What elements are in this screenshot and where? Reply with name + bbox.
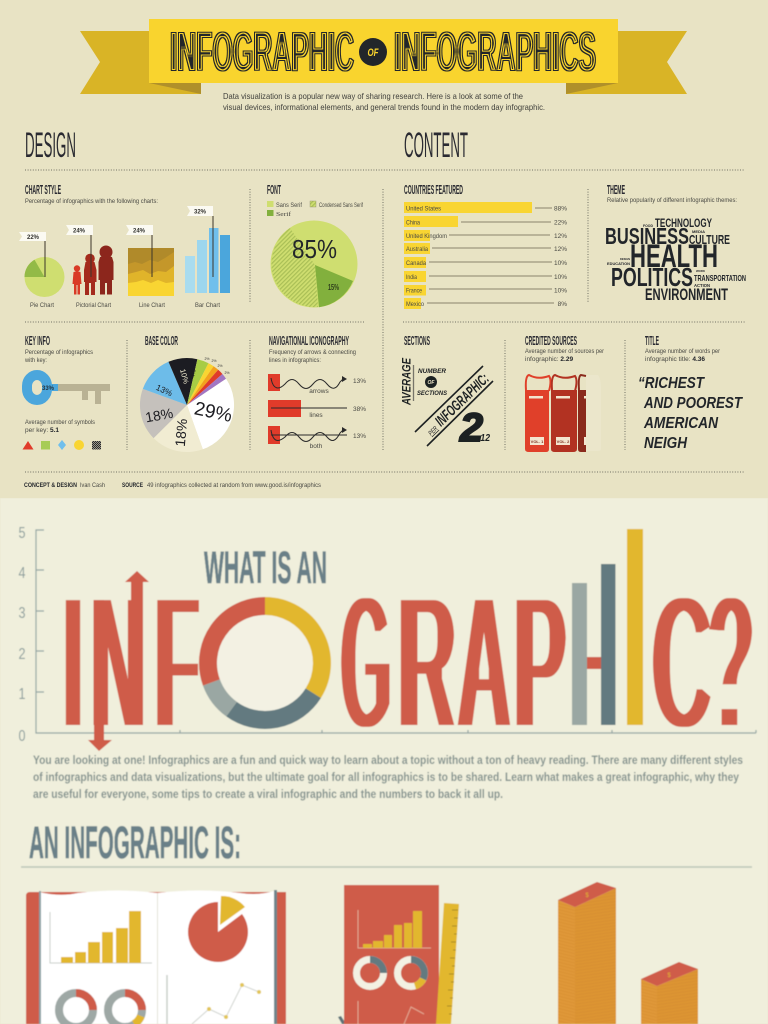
base color pie chart: 2%: [211, 359, 217, 363]
bar chart icon: [185, 206, 230, 309]
arrows row: [268, 374, 366, 395]
donut chart letter O: [208, 606, 322, 720]
lines row: lines: [309, 412, 323, 419]
book bar chart: [50, 911, 152, 963]
intro text: visual devices, informational elements, and general trends found in the modern day infographic.: [223, 102, 545, 112]
lines row: [268, 400, 366, 419]
panel: theme: [605, 182, 746, 304]
panel: what is an infographic: [0, 498, 768, 1024]
base color pie chart: [140, 357, 234, 452]
base color pie chart: 2%: [204, 357, 210, 361]
countries values: 10%: [554, 260, 567, 267]
clipboard line chart: [358, 1001, 424, 1024]
word cloud: DESIGN: [620, 257, 630, 261]
lines row: 38%: [353, 406, 366, 413]
countries labels: United Kingdom: [406, 233, 447, 240]
font pie chart: [270, 220, 358, 308]
panel: what is an infographic: AN INFOGRAPHIC IS:: [29, 817, 241, 868]
font pie chart: 15%: [328, 283, 339, 292]
countries labels: France: [406, 288, 422, 294]
navigation subtitle: Frequency of arrows & connecting: [269, 349, 356, 356]
ribbon left fold: [149, 83, 201, 94]
text: NAVIGATIONAL ICONOGRAPHY: [269, 333, 349, 348]
ribbon right tail: [566, 31, 687, 94]
chart style subtitle: Percentage of infographics with the following charts:: [25, 198, 158, 205]
chart axes: 1: [18, 686, 26, 703]
countries values: 88%: [554, 206, 567, 212]
countries values: 8%: [558, 301, 567, 308]
footer credits: CONCEPT & DESIGN: [24, 482, 77, 489]
title subtitle: infographic title: 4.36: [645, 356, 705, 363]
of badge: OF: [368, 47, 379, 59]
panel: sections: [400, 333, 493, 450]
quote text: “RICHEST: [638, 375, 705, 392]
word cloud: [605, 217, 746, 304]
panel: key info: [22, 333, 110, 450]
sections typographic lockup: [400, 357, 493, 450]
clipboard bar chart: [358, 910, 431, 948]
big word letters: I: [64, 553, 82, 772]
panel: font: FONT: [267, 182, 281, 197]
pie chart icon: [19, 232, 64, 309]
title ribbon: [80, 19, 687, 94]
big word letters: P: [514, 553, 566, 772]
of badge: [359, 38, 387, 66]
word cloud: TECHNOLOGY: [655, 217, 712, 230]
panel: navigational iconography: [268, 333, 366, 450]
line chart icon: 24%: [133, 228, 146, 234]
chart axes: 5: [18, 525, 26, 542]
quote text: AMERICAN: [643, 415, 718, 432]
title words: INFOGRAPHIC: [170, 20, 354, 84]
chart axes: 2: [18, 646, 26, 663]
key info subtitle: with key:: [24, 357, 47, 364]
pencil tip: [338, 1016, 346, 1024]
panel: theme: THEME: [607, 182, 625, 197]
sections typographic lockup: NUMBER: [418, 368, 446, 375]
quote text: AND POOREST: [643, 395, 743, 412]
panel: credited sources: [525, 333, 605, 452]
key info subtitle: [24, 349, 94, 364]
illustration: tall coin stack: [558, 882, 616, 1024]
book line chart: [167, 975, 261, 1024]
title subtitle: [645, 348, 721, 363]
book donut one: [59, 993, 93, 1024]
clipboard panel: [344, 885, 439, 1024]
countries labels: Canada: [406, 260, 426, 267]
base color pie chart: 4%: [190, 369, 198, 378]
book one: VOL. 1: [531, 439, 544, 444]
key info subtitle: Percentage of infographics: [25, 349, 94, 356]
panel: title words: [638, 333, 743, 452]
book pie chart: [188, 896, 248, 962]
chart axes: 0: [18, 728, 26, 745]
navigation subtitle: [269, 349, 356, 364]
sections typographic lockup: AVERAGE: [400, 357, 414, 406]
word cloud: EDUCATION: [607, 261, 630, 266]
arrows row: arrows: [309, 388, 329, 395]
font pie chart: 85%: [292, 234, 337, 264]
word cloud: WORK: [696, 269, 706, 273]
book cover: [26, 892, 286, 1024]
word cloud: ACTION: [694, 283, 710, 288]
base color pie chart: 18%: [144, 405, 174, 425]
panel: base color: [140, 333, 234, 452]
footer credits: 49 infographics collected at random from www.good.is/infographics: [147, 482, 321, 489]
pictorial chart icon: [66, 225, 114, 309]
countries values: 22%: [554, 220, 567, 226]
font legend: [267, 201, 363, 218]
credited sources subtitle: [525, 348, 605, 363]
countries leader lines: [427, 208, 554, 303]
countries values: [554, 206, 567, 308]
intro text: [223, 91, 545, 112]
big word letters: R: [398, 553, 456, 772]
countries values: 12%: [554, 233, 567, 240]
word cloud: CULTURE: [689, 232, 730, 247]
sections typographic lockup: PER: [428, 425, 440, 437]
countries labels: United States: [406, 206, 442, 212]
countries values: 10%: [554, 274, 567, 281]
word cloud: BUSINESS: [605, 223, 689, 249]
sections typographic lockup: 2: [459, 406, 483, 450]
panel: key info: KEY INFO: [25, 333, 50, 348]
countries labels: [406, 206, 447, 308]
pie chart icon: Pie Chart: [30, 302, 54, 309]
both row: both: [310, 443, 323, 450]
countries labels: Australia: [406, 246, 428, 253]
sections typographic lockup: .12: [478, 433, 490, 444]
symbols per key text: Average number of symbols: [25, 419, 96, 426]
credited sources subtitle: Average number of sources per: [525, 348, 605, 355]
theme subtitle: Relative popularity of different infographic themes:: [607, 197, 737, 204]
font legend: Serif: [276, 211, 292, 218]
big word letters: F: [155, 553, 199, 772]
icon: books: [525, 375, 601, 452]
word cloud: FOOD: [643, 223, 653, 228]
faded book: [586, 375, 601, 451]
quote text: [638, 375, 743, 452]
illustration: short coin stack: [641, 962, 698, 1024]
illustration: open book: [26, 890, 286, 1024]
font legend: Sans Serif: [276, 202, 302, 209]
ribbon main band: [149, 19, 618, 83]
bar chart icon: Bar Chart: [195, 302, 220, 309]
big word letters: [64, 553, 754, 772]
symbols row: [22, 440, 101, 450]
base color pie chart: 13%: [154, 382, 174, 399]
countries labels: India: [406, 274, 417, 281]
panel: sections: SECTIONS: [404, 333, 430, 348]
illustration: tall coin stack: $: [585, 893, 589, 899]
line chart icon: [126, 225, 174, 309]
word cloud: MEDIA: [692, 229, 705, 234]
ruler: [436, 903, 459, 1024]
quote text: NEIGH: [644, 435, 687, 452]
big word letters: G: [341, 553, 391, 772]
sections typographic lockup: OF: [428, 380, 435, 386]
sections typographic lockup: INFOGRAPHIC:: [432, 370, 493, 430]
countries bars: [404, 202, 532, 309]
both row: 13%: [353, 433, 366, 440]
book three: [578, 375, 586, 452]
title subtitle: Average number of words per: [645, 348, 721, 355]
clipboard donut one: [356, 960, 384, 986]
panel: countries featured: COUNTRIES FEATURED: [404, 182, 463, 197]
illustration: short coin stack: $: [667, 973, 671, 979]
book two: VOL. 2: [557, 439, 570, 444]
base color pie chart: 2%: [224, 371, 230, 375]
panel: chart style: [19, 182, 230, 309]
arrows row: 13%: [353, 378, 366, 385]
intro paragraph: [33, 755, 743, 801]
base color pie chart: 2%: [217, 364, 223, 368]
arrow down through N: [88, 600, 112, 751]
panel: countries featured: [404, 182, 567, 309]
panel: credited sources: CREDITED SOURCES: [525, 333, 577, 348]
bar letter I: [627, 529, 643, 725]
panel: chart style: CHART STYLE: [25, 182, 61, 197]
base color pie chart: 29%: [192, 398, 234, 427]
chart axes: [18, 525, 756, 745]
big word letters: A: [457, 553, 511, 772]
base color pie chart: 10%: [178, 368, 191, 385]
base color pie chart: 18%: [172, 418, 190, 447]
big word letters: N: [91, 553, 145, 772]
both row: [268, 426, 366, 450]
symbols per key text: [25, 419, 96, 434]
sections typographic lockup: SECTIONS: [417, 390, 448, 397]
panel: base color: BASE COLOR: [145, 333, 178, 348]
navigation subtitle: lines in infographics:: [269, 357, 321, 364]
line chart icon: Line Chart: [139, 302, 165, 309]
footer credits: SOURCE: [122, 482, 143, 489]
word cloud: POLITICS: [611, 262, 693, 292]
intro text: Data visualization is a popular new way of sharing research. Here is a look at some of the: [223, 91, 523, 101]
clipboard donut two: [398, 960, 424, 986]
countries values: 10%: [554, 288, 567, 294]
countries labels: Mexico: [406, 301, 424, 308]
pictorial chart icon: 24%: [73, 228, 86, 234]
chart axes: 3: [18, 605, 26, 622]
panel: what is an infographic: WHAT IS AN: [204, 542, 327, 593]
arrow up through N: [125, 571, 149, 725]
book donut two: [108, 993, 142, 1024]
ribbon right fold: [566, 83, 618, 94]
pie chart icon: 22%: [27, 235, 40, 241]
countries labels: China: [406, 220, 420, 226]
icon: key: 33%: [42, 386, 55, 392]
chart axes: 4: [18, 565, 26, 582]
ribbon left tail: [80, 31, 201, 94]
footer credits: [24, 482, 321, 489]
word cloud: ENVIRONMENT: [645, 286, 728, 304]
bar letter H: [572, 564, 616, 725]
pictorial chart icon: Pictorial Chart: [76, 302, 111, 309]
book pages: [39, 890, 277, 1024]
word cloud: HEALTH: [630, 238, 718, 274]
countries values: 12%: [554, 246, 567, 253]
text: CONTENT: [404, 126, 468, 165]
text: DESIGN: [25, 126, 76, 165]
panel: title words: TITLE: [645, 333, 659, 348]
illustration: clipboard with ruler: [338, 885, 459, 1024]
font legend: Condensed Sans Serif: [319, 202, 363, 209]
bar chart icon: 32%: [194, 210, 207, 216]
intro paragraph: are useful for everyone, some tips to create a viral infographic and the numbers to back it all up.: [33, 789, 503, 801]
symbols per key text: per key: 5.1: [25, 427, 59, 434]
footer credits: Ivan Cash: [80, 482, 106, 489]
panel: font: [267, 182, 363, 308]
credited sources subtitle: infographic: 2.29: [525, 356, 573, 363]
